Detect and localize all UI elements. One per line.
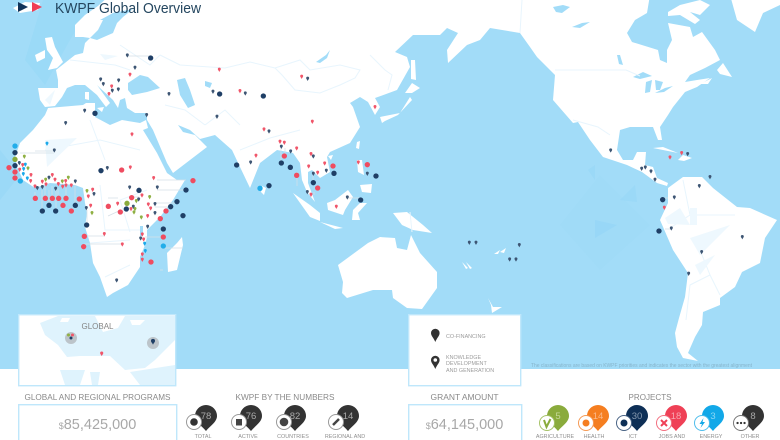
stat: regional: 14	[343, 411, 353, 422]
panel: global and regional amount	[19, 405, 177, 440]
bottom white band	[0, 369, 780, 440]
Australia	[338, 235, 437, 309]
classification note: The classifications are based on KWPF priorities and indicates the sector with the greatest alignment	[531, 363, 753, 369]
legend: co-financing: CO-FINANCING	[446, 334, 486, 340]
project: health	[578, 405, 609, 440]
panel: grant amount: $64,145,000	[426, 417, 503, 433]
project: ICT: 30	[632, 411, 642, 422]
markers: Latin America and Caribbean	[609, 148, 744, 276]
project: ICT: ICT	[629, 434, 638, 440]
global markers	[65, 332, 159, 356]
project: other	[734, 405, 764, 440]
stat: countries: 82	[290, 411, 300, 422]
stat: total: 78	[201, 411, 211, 422]
heading: grant amount: GRANT AMOUNT	[430, 393, 499, 402]
stat: active	[232, 405, 262, 440]
project: other: 8	[750, 411, 756, 422]
leader lines	[20, 56, 671, 270]
stat: countries: COUNTRIES	[277, 434, 309, 440]
inland seas and lakes	[90, 5, 673, 236]
project: agriculture	[536, 405, 575, 440]
markers: Europe and Central Asia	[64, 53, 247, 125]
title: KWPF Global Overview	[55, 0, 201, 17]
logo	[18, 2, 42, 12]
project: agriculture: 5	[555, 411, 561, 422]
decorative ocean patterns	[0, 0, 650, 270]
stat: countries	[276, 405, 309, 440]
heading: global: GLOBAL	[81, 322, 114, 331]
project: energy	[694, 405, 724, 440]
islands	[13, 0, 780, 313]
panel: global	[19, 315, 176, 386]
project: health: HEALTH	[584, 434, 605, 440]
heading: projects: PROJECTS	[628, 393, 672, 402]
stat: active: ACTIVE	[238, 434, 258, 440]
markers: Africa	[6, 132, 257, 283]
stat: total: TOTAL	[195, 434, 211, 440]
project: other: OTHER	[741, 434, 760, 440]
heading: KWPF by the numbers: KWPF BY THE NUMBERS	[236, 393, 334, 402]
stat: total	[186, 405, 217, 440]
South America	[660, 177, 777, 361]
project: jobs and	[656, 405, 687, 440]
country borders	[45, 0, 735, 320]
heading: global and regional programs: GLOBAL AND REGIONAL PROGRAMS	[24, 393, 170, 402]
stat: regional	[325, 405, 365, 440]
project: jobs and: JOBS AND	[659, 434, 685, 440]
markers: East and Southeast Asia	[257, 75, 379, 209]
Eurasia and North America	[38, 0, 720, 202]
project: health: 14	[593, 411, 603, 422]
panel: legend	[409, 315, 521, 386]
Africa	[15, 103, 185, 297]
project: jobs and: 18	[671, 411, 681, 422]
project: energy: ENERGY	[700, 434, 723, 440]
project: ICT	[616, 405, 648, 440]
pale pattern patches on land	[45, 54, 730, 275]
panel: global and regional amount: $85,425,000	[59, 417, 136, 433]
project: agriculture: AGRICULTURE	[536, 434, 575, 440]
panel: grant amount	[409, 405, 522, 440]
legend: knowledge development: KNOWLEDGE	[446, 355, 481, 361]
project: energy: 3	[710, 411, 716, 422]
stat: active: 76	[246, 411, 256, 422]
legend: knowledge development: AND GENERATION	[446, 368, 494, 374]
stat: regional: REGIONAL AND	[325, 434, 365, 440]
legend: knowledge development	[431, 355, 494, 374]
legend: knowledge development: DEVELOPMENT	[446, 361, 487, 367]
markers: Pacific islands	[468, 241, 521, 262]
